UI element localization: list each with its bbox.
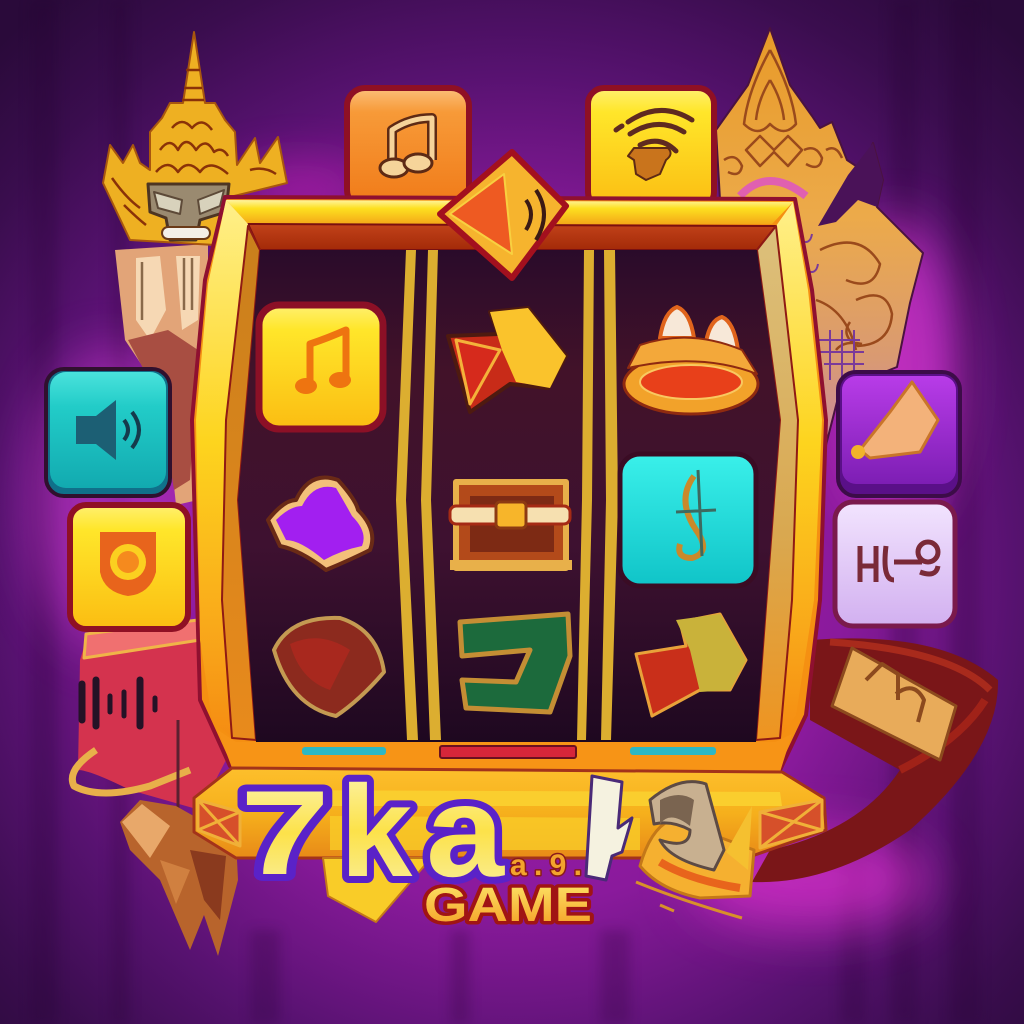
frame red band: [248, 224, 776, 250]
yellow wifi button: [588, 88, 714, 208]
symbol: purple gem: [268, 478, 372, 570]
lilac key button: [835, 502, 955, 626]
frame outer: [192, 197, 826, 770]
slot machine cabinet: [192, 197, 826, 772]
frame bottom lip: [218, 730, 792, 772]
symbol: red ruby: [274, 618, 384, 716]
frame right rail: [776, 202, 822, 738]
frame right bevel: [756, 226, 798, 740]
right temple tower: [716, 28, 923, 500]
reel bottom lights: [302, 746, 716, 758]
symbol: gold crown: [624, 307, 758, 414]
teal speaker button: [46, 369, 170, 496]
symbol: green letter: [460, 614, 570, 712]
frame top rail: [226, 200, 793, 224]
red sound banner: [72, 620, 226, 830]
reel divider bars: [396, 250, 618, 740]
symbol: treasure chest: [450, 482, 572, 570]
reels window: [238, 250, 780, 742]
game logo: a: [426, 758, 506, 904]
frame left rail: [196, 200, 248, 738]
orange music button: [347, 88, 469, 208]
red ribbon with gold plaque: [752, 638, 998, 882]
game logo: GAME: [424, 879, 592, 932]
speaker badge: [440, 152, 566, 278]
machine base: [194, 768, 826, 922]
game logo: a.9.: [510, 849, 582, 882]
symbol: gold red star: [636, 614, 746, 716]
symbol: cyan clef tile: [620, 454, 756, 586]
symbol: yellow music tile: [259, 305, 383, 429]
scroll emblem: [640, 782, 754, 898]
game logo: k: [340, 758, 413, 904]
game logo: [240, 758, 632, 932]
game logo: 7: [240, 766, 330, 900]
purple gem button: [838, 372, 960, 496]
left temple guardian statue: [103, 32, 287, 505]
gold floor streaks: [636, 882, 742, 918]
symbol: red gold star: [448, 308, 566, 412]
frame left bevel: [222, 226, 260, 740]
yellow shield button: [70, 505, 188, 629]
golden banner tassel: [120, 800, 238, 956]
